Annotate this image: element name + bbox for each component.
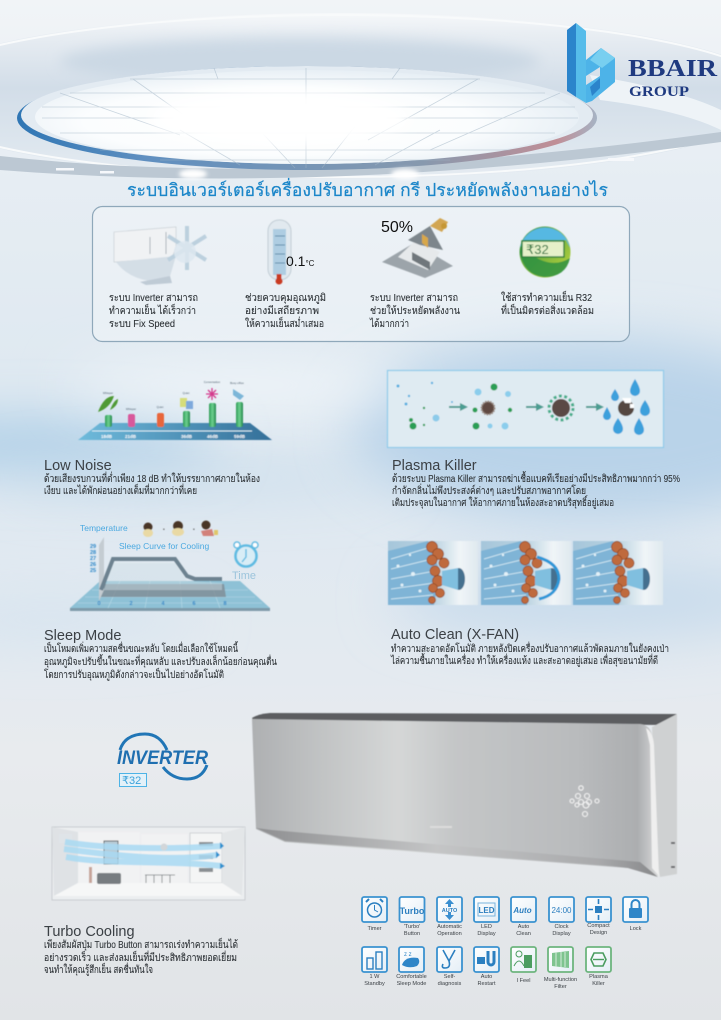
text: Low Noise body: เงียบ และได้พักผ่อนอย่างเต็มที่มากกว่าที่เคย <box>44 483 197 497</box>
chart: low noise decibel bars: Whisper <box>126 407 136 411</box>
feature: Comfortable Sleep Mode <box>396 947 427 987</box>
feature: Auto Clean: Auto <box>512 906 532 915</box>
chart: sleep curve: 28 <box>90 550 96 556</box>
temperature value: 0.1°C <box>286 253 315 269</box>
text: Turbo Cooling body <box>44 937 238 976</box>
benefit text 3 <box>369 293 460 330</box>
characters: • <box>193 527 195 533</box>
chart: sleep curve: 0 <box>97 601 101 607</box>
chart: sleep curve: 26 <box>90 562 96 568</box>
feature: Plasma Killer <box>586 947 611 987</box>
icon: energy saving house <box>382 218 453 278</box>
text: Low Noise body: ด้วยเสียงรบกวนที่ต่ำเพียง 18 dB ทำให้บรรยากาศภายในห้อง <box>44 471 260 485</box>
chart: low noise decibel bars: Conversation <box>204 380 221 384</box>
chart: sleep curve: 29 <box>90 544 96 550</box>
heading: Auto Clean: Auto Clean (X-FAN) <box>391 627 519 643</box>
chart: sleep curve: 4 <box>161 601 165 607</box>
feature: Compact Design: Design <box>590 930 607 936</box>
chart: sleep curve: 8 <box>223 601 227 607</box>
feature: Clock Display: Clock <box>554 924 569 930</box>
chart label: Time: Time <box>232 570 256 582</box>
heading: Plasma Killer: Plasma Killer <box>392 458 477 474</box>
feature: Self-diagnosis: diagnosis <box>438 981 462 987</box>
feature: Turbo Button: 'Turbo' <box>404 924 420 930</box>
benefit text 1: ทำความเย็น ได้เร็วกว่า <box>109 303 196 317</box>
benefit text 1: ระบบ Inverter สามารถ <box>109 293 198 304</box>
feature: Timer <box>362 897 387 932</box>
text: Sleep Mode body <box>44 641 277 681</box>
feature: 1W Standby: Standby <box>364 981 385 987</box>
chart: low noise decibel bars: 59dB <box>234 434 246 439</box>
R32 tag: ₹32 <box>122 775 141 787</box>
chart: sleep curve <box>70 520 270 611</box>
frame 2 <box>481 541 571 605</box>
feature: Turbo Button: Button <box>404 931 420 937</box>
panel: inverter benefits <box>92 206 630 342</box>
feature: 1W Standby: 1 W <box>370 974 380 980</box>
chart: sleep curve: 6 <box>192 601 196 607</box>
chart label: Temperature: Temperature <box>80 523 128 533</box>
icon: bacteria <box>482 402 494 414</box>
characters: • <box>163 527 165 533</box>
benefit text 4 <box>501 290 594 317</box>
chart: low noise decibel bars <box>78 380 272 440</box>
ceiling grid <box>42 68 578 168</box>
control panel <box>570 786 599 816</box>
chart: low noise decibel bars: 36dB <box>181 434 193 439</box>
feature: Multi-function Filter: Multi-function <box>544 977 577 983</box>
benefit text 1: ระบบ Fix Speed <box>109 319 175 330</box>
savings percent: 50% <box>381 219 413 236</box>
feature: Lock <box>623 897 648 932</box>
feature: Clock Display: Display <box>552 931 571 937</box>
feature: LED Display: Display <box>477 931 496 937</box>
text: Turbo Cooling body: อย่างรวดเร็ว และส่งลมเย็นที่มีประสิทธิภาพยอดเยี่ยม <box>44 950 237 964</box>
chart: low noise decibel bars: Whisper <box>103 391 113 395</box>
icon: thermometer <box>268 220 291 284</box>
feature: Turbo Button <box>400 897 425 937</box>
text: Sleep Mode body: อุณหภูมิจะปรับขึ้นในขณะที่คุณหลับ และปรับลงเล็กน้อยก่อนคุณตื่น <box>44 654 277 668</box>
text: Sleep Mode body: เป็นโหมดเพิ่มความสดชื่นขณะหลับ โดยเมื่อเลือกใช้โหมดนี้ <box>44 641 238 655</box>
icon: R32 globe: ₹32 <box>526 242 549 257</box>
benefit text 3: ได้มากกว่า <box>369 317 409 330</box>
feature: Auto Clean <box>511 897 536 937</box>
benefit text 2: ช่วยควบคุมอุณหภูมิ <box>245 292 326 304</box>
feature: Clock Display: 24:00 <box>551 906 572 915</box>
feature: Auto Restart: Restart <box>477 981 496 987</box>
text: Plasma Killer body: เติมประจุลบในอากาศ ให้อากาศภายในห้องสะอาดบริสุทธิ์อยู่เสมอ <box>392 495 614 509</box>
feature: Auto Restart: Auto <box>481 974 492 980</box>
feature: Self-diagnosis: Self- <box>444 974 455 980</box>
feature: Multi-function Filter: Filter <box>554 984 567 990</box>
feature: Lock: Lock <box>630 926 642 932</box>
heading: Turbo Cooling: Turbo Cooling <box>44 924 135 940</box>
inverter wordmark: INVERTER <box>117 748 208 769</box>
title: ระบบอินเวอร์เตอร์เครื่องปรับอากาศ กรี ประหยัดพลังงานอย่างไร <box>127 178 608 200</box>
brand name: BBAIR <box>628 56 718 82</box>
feature: Timer: Timer <box>367 926 382 932</box>
chart: sleep curve: 2 <box>129 601 133 607</box>
characters <box>143 520 218 537</box>
logo: BBAIR Group <box>567 23 718 103</box>
feature: Compact Design: Compact <box>587 923 610 929</box>
feature: Turbo Button: Turbo <box>400 906 425 916</box>
feature: Comfortable Sleep Mode: Sleep Mode <box>397 981 426 987</box>
chart: low noise decibel bars: Quiet <box>183 391 190 395</box>
text: Sleep Mode body: โดยการปรับอุณหภูมิดังกล่าวจะเป็นไปอย่างอัตโนมัติ <box>44 667 224 681</box>
chart: low noise decibel bars: Quiet <box>157 405 164 409</box>
feature: Automatic Operation: AUTO <box>442 908 458 914</box>
heading: Sleep Mode: Sleep Mode <box>44 628 121 644</box>
feature: Auto Clean: Clean <box>516 931 531 937</box>
chart: sleep curve: 25 <box>90 568 96 574</box>
feature: Clock Display <box>549 897 574 937</box>
benefit text 2: อย่างมีเสถียรภาพ <box>245 304 319 317</box>
air conditioner unit <box>252 713 677 877</box>
text: Plasma Killer body <box>392 471 680 509</box>
feature: Automatic Operation: Operation <box>437 931 462 937</box>
feature: I Feel <box>511 947 536 984</box>
logo: Inverter R32 <box>117 734 208 787</box>
brand group: GROUP <box>629 84 689 100</box>
feature: 1W Standby <box>362 947 387 987</box>
frame 1 <box>388 541 478 605</box>
feature: Automatic Operation: Automatic <box>437 924 462 930</box>
feature: I Feel: I Feel <box>516 978 530 984</box>
feature: Automatic Operation <box>437 897 462 937</box>
ceiling ring illustration <box>0 13 721 179</box>
feature: Plasma Killer: Killer <box>592 981 605 987</box>
text: Auto Clean body <box>390 641 669 667</box>
benefit text 3: ช่วยให้ประหยัดพลังงาน <box>370 304 460 317</box>
chart label: Sleep Curve for Cooling: Sleep Curve for Cooling <box>119 541 210 551</box>
chart: low noise decibel bars: 21dB <box>125 434 137 439</box>
diagram: plasma killer sequence <box>388 370 664 448</box>
icon: b mark <box>567 23 615 103</box>
benefit text 2 <box>245 292 326 330</box>
text: Low Noise body <box>44 471 260 497</box>
benefit text 2: ให้ความเย็นสม่ำเสมอ <box>245 316 324 330</box>
heading: Low Noise: Low Noise <box>44 458 112 474</box>
frame 3 <box>573 541 663 605</box>
chart: low noise decibel bars: 46dB <box>207 434 219 439</box>
icon: alarm clock <box>234 542 258 566</box>
benefit text 3: ระบบ Inverter สามารถ <box>370 293 458 304</box>
feature: LED Display: LED <box>478 906 495 915</box>
feature: LED Display <box>474 897 499 937</box>
chart: low noise decibel bars: 18dB <box>101 434 113 439</box>
text: Plasma Killer body: กำจัดกลิ่นไม่พึงประสงค์ต่างๆ และปรับสภาพอากาศโดย <box>392 483 586 497</box>
feature: Auto Clean: Auto <box>518 924 529 930</box>
feature: Auto Restart <box>474 947 499 987</box>
text: Turbo Cooling body: เพียงสัมผัสปุ่ม Turbo Button สามารถเร่งทำความเย็นได้ <box>44 937 238 951</box>
benefit text 4: ที่เป็นมิตรต่อสิ่งแวดล้อม <box>501 303 594 317</box>
images: auto clean X-FAN coil sequence <box>388 541 663 605</box>
text: Turbo Cooling body: จนทำให้คุณรู้สึกเย็น สดชื่นทันใจ <box>44 962 153 976</box>
feature: Comfortable Sleep Mode: Comfortable <box>396 974 427 980</box>
feature: LED Display: LED <box>481 924 492 930</box>
feature: Self-diagnosis <box>437 947 462 987</box>
chart: low noise decibel bars: Busy office <box>230 381 244 385</box>
benefit text 1 <box>109 293 198 330</box>
icon: fast cooling AC <box>114 226 206 285</box>
illustration: turbo cooling room <box>52 827 245 900</box>
feature: Plasma Killer: Plasma <box>589 974 609 980</box>
feature: Comfortable Sleep Mode: z z <box>404 952 412 958</box>
chart: sleep curve: 27 <box>90 556 96 562</box>
feature icon grid <box>362 897 648 990</box>
icon: R32 globe <box>520 226 570 278</box>
benefit text 4: ใช้สารทำความเย็น R32 <box>501 290 592 304</box>
feature: Compact Design <box>586 897 611 936</box>
feature: Multi-function Filter <box>544 947 577 990</box>
